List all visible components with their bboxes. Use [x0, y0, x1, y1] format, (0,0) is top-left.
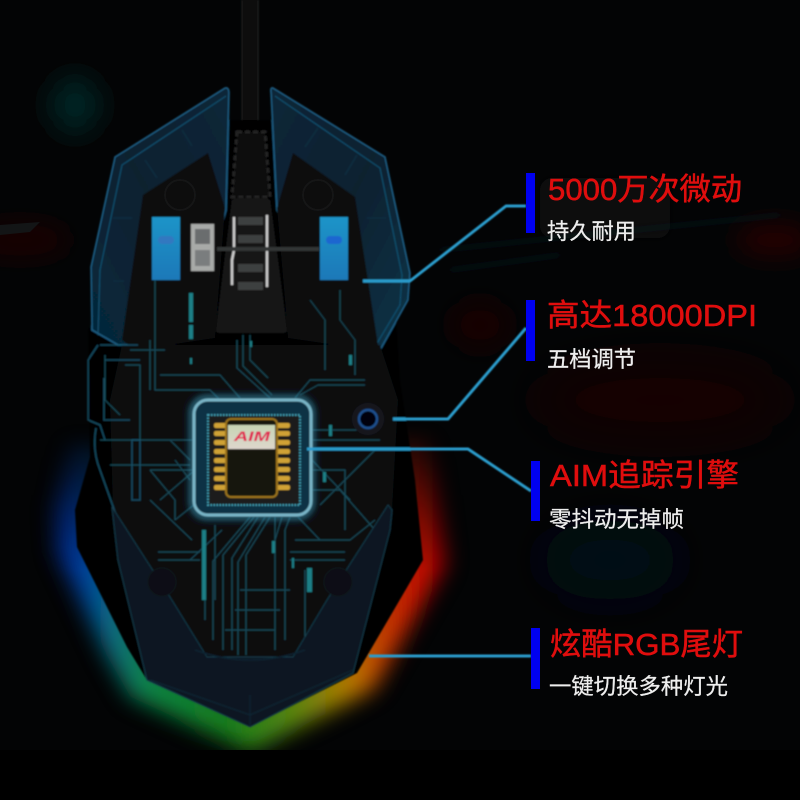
left pins [214, 423, 228, 490]
AIM logo: AIM [233, 428, 270, 444]
callout: micro switch: 5000万次微动 [548, 172, 742, 207]
callout: dpi [526, 298, 757, 372]
chip label [228, 425, 275, 449]
left micro switch [152, 217, 180, 280]
right top shell [271, 88, 410, 350]
axle [217, 247, 319, 251]
left top shell [91, 88, 229, 345]
callout: rgb [531, 627, 743, 699]
cable strain relief [232, 132, 270, 197]
wheel rims [232, 215, 267, 287]
callout: micro switch [526, 172, 742, 244]
right micro switch [320, 217, 348, 280]
chip substrate [208, 415, 300, 505]
main mouse artwork [75, 0, 531, 727]
rgb tail light glow [74, 430, 426, 731]
callout: sensor: 零抖动无掉帧 [549, 507, 684, 532]
chip outer halo [192, 398, 312, 517]
right pins [276, 423, 290, 490]
callout: sensor [531, 458, 739, 532]
wheel housing [216, 200, 287, 333]
callout: dpi: 五档调节 [547, 347, 636, 372]
circuit traces [100, 280, 380, 655]
chip glow frame [194, 400, 311, 515]
silver encoder [191, 224, 214, 271]
leader lines [307, 206, 531, 656]
wheel treads [238, 221, 263, 286]
chip module [192, 398, 312, 517]
callout: rgb: 一键切换多种灯光 [549, 674, 728, 699]
mouse body [75, 120, 423, 727]
wheel [233, 198, 269, 298]
palm shell [112, 505, 392, 727]
chip die [226, 419, 277, 497]
scroll wheel assembly [216, 132, 319, 333]
dpi button [352, 403, 384, 435]
callout: dpi: 高达18000DPI [547, 298, 757, 333]
callouts [526, 172, 757, 699]
callout: micro switch: 持久耐用 [547, 219, 636, 244]
inner chassis with circuit board [110, 153, 398, 657]
callout: sensor: AIM追踪引擎 [550, 458, 739, 493]
left side buttons [88, 345, 140, 540]
cable [242, 0, 259, 135]
callout: rgb: 炫酷RGB尾灯 [550, 627, 743, 662]
teal pcb components [189, 293, 352, 600]
